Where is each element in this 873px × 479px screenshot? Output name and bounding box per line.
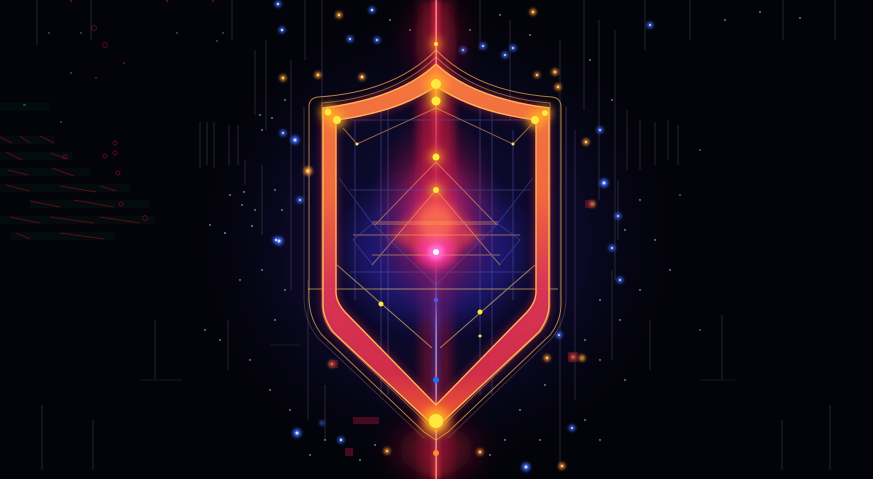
- amber stars: [280, 9, 595, 469]
- node glows: [321, 39, 551, 434]
- central vertical beam: [420, 0, 452, 479]
- background nebula: [186, 1, 686, 479]
- blue star glows: [273, 1, 653, 471]
- star cores: [204, 3, 801, 469]
- shield main neon band: [323, 64, 549, 428]
- red pixel blocks: [330, 200, 593, 456]
- shield interior: [308, 100, 558, 395]
- interior core glow: [370, 110, 502, 320]
- glitch pattern at left: [0, 0, 224, 240]
- band highlights: [323, 64, 549, 428]
- band fill: [323, 64, 549, 428]
- node cores: [324, 42, 548, 428]
- starfield: [204, 1, 801, 471]
- pink core node: [428, 244, 444, 260]
- shield outer thin frame: [304, 50, 566, 440]
- diamond glow: [390, 190, 482, 262]
- band glow: [323, 64, 549, 428]
- geometric line work: [308, 100, 558, 395]
- red glow around apex and tip: [398, 5, 474, 474]
- blue-purple interior glow: [351, 180, 521, 320]
- glowing nodes: [321, 39, 551, 456]
